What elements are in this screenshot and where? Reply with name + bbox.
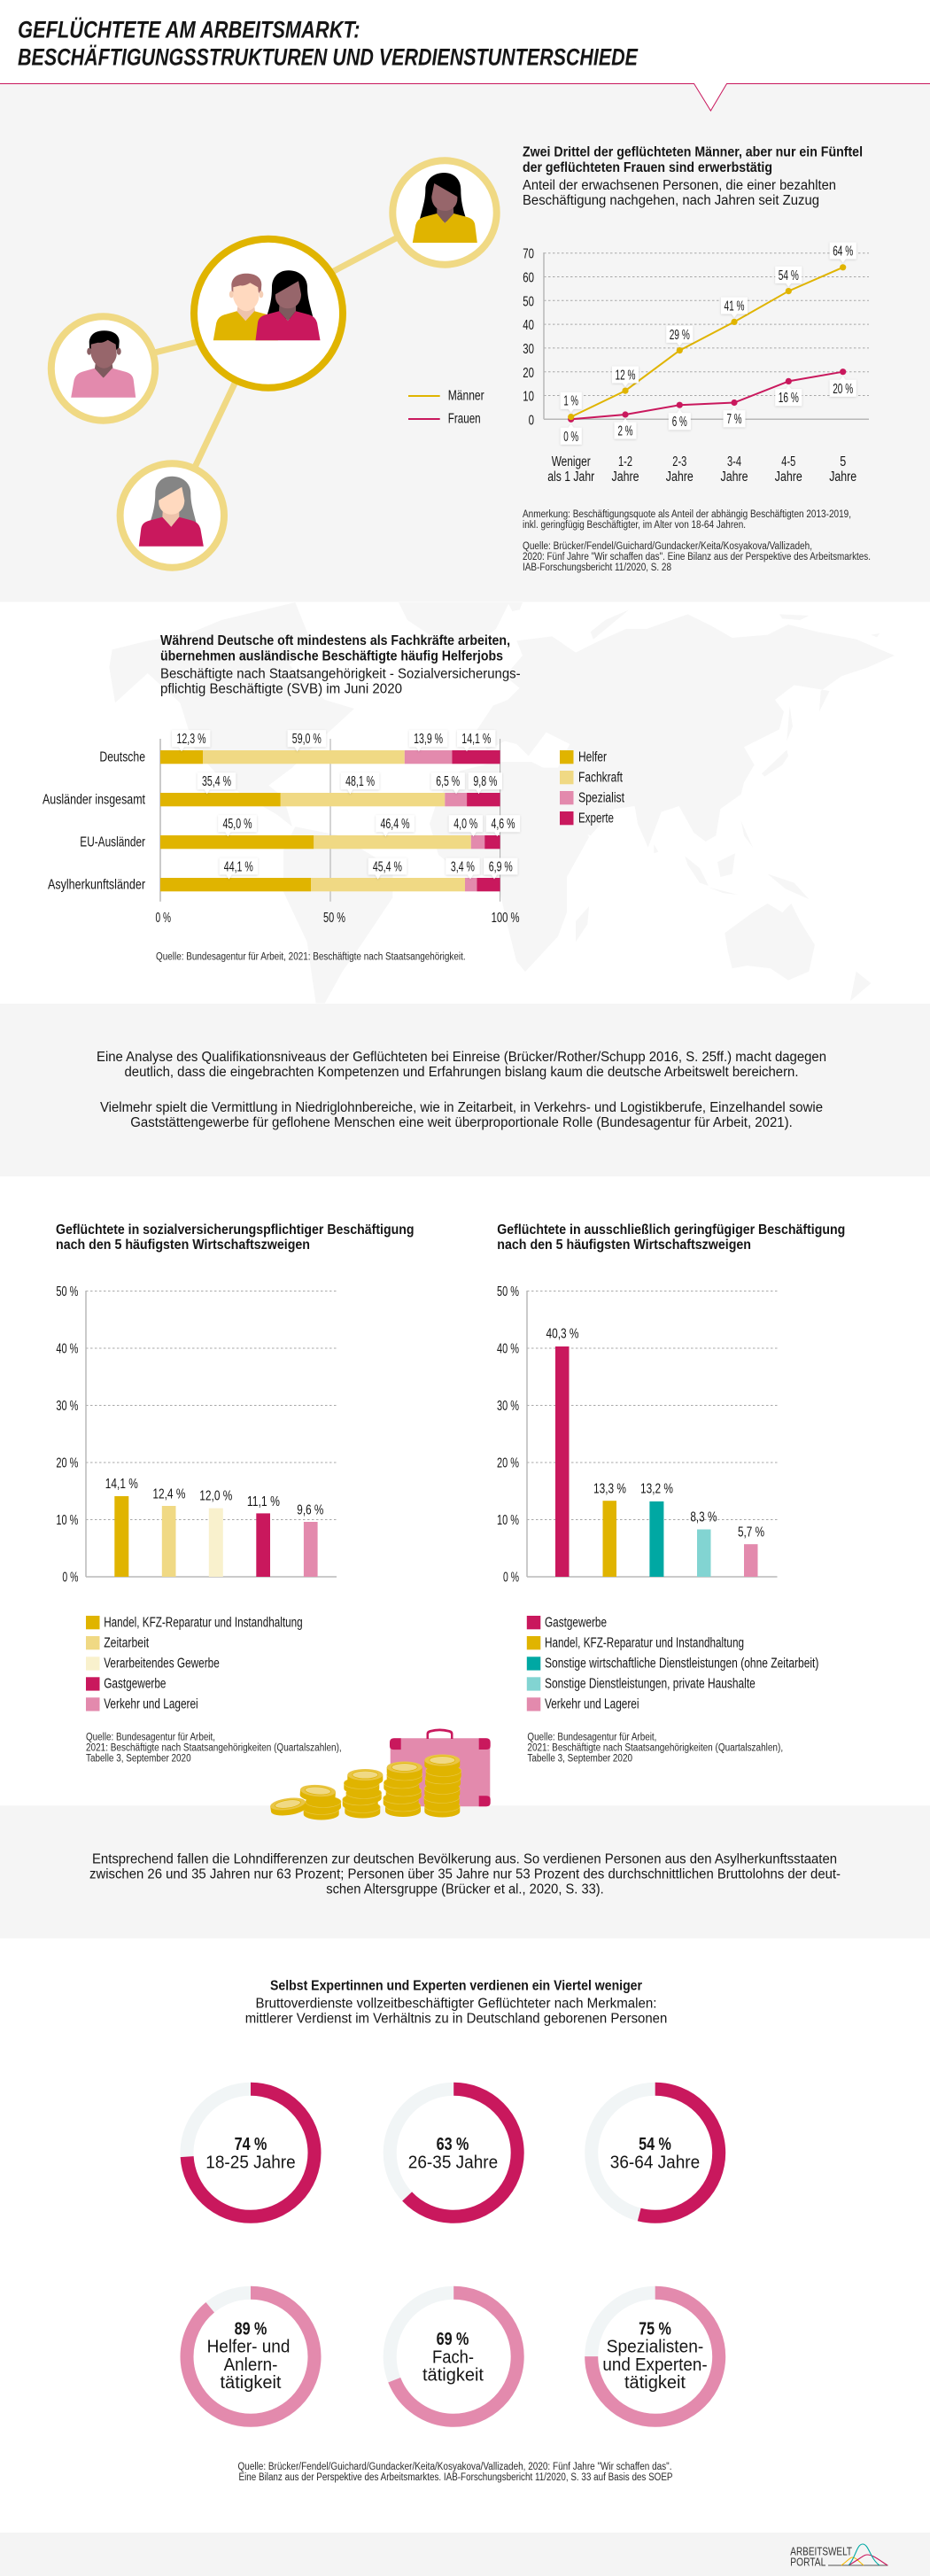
x axis labels: 0 % — [156, 911, 171, 926]
heading: left sector chart — [56, 1222, 415, 1253]
y axis labels: 0 % — [503, 1570, 519, 1586]
x axis labels: Jahre — [611, 469, 639, 485]
y axis labels: 20 — [523, 366, 534, 381]
source note: left sectors — [86, 1733, 342, 1765]
legend: left sectors: Zeitarbeit — [104, 1635, 150, 1651]
row: Deutsche: 14,1 % — [461, 732, 491, 747]
data labels: Männer: 12 % — [615, 369, 636, 383]
bars — [555, 1346, 758, 1577]
data labels: Frauen: 2 % — [618, 423, 633, 439]
x axis labels: 1-2 — [618, 454, 632, 469]
y axis labels: 30 — [523, 342, 534, 357]
source note: left sectors: Tabelle 3, September 2020 — [86, 1754, 191, 1765]
value labels: 13,3 % — [593, 1481, 626, 1497]
world map background — [109, 602, 895, 1004]
donut: 36-64 Jahre: 54 % — [639, 2135, 671, 2154]
heading: earnings: Selbst Expertinnen und Experten verdienen ein Viertel weniger — [270, 1979, 642, 1993]
logo: Arbeitswelt Portal: PORTAL — [790, 2556, 825, 2568]
row: EU-Ausländer: 46,4 % — [381, 817, 410, 832]
y axis labels — [497, 1284, 519, 1586]
panel: qualification text: Gaststättengewerbe für geflohene Menschen eine weit überproportionale Rolle (Bundesagentur für Arbeit, 2021). — [130, 1115, 793, 1130]
donut: Fachtätigkeit: Fach- — [432, 2347, 474, 2367]
donut: Spezialisten- und Expertentätigkeit — [592, 2293, 719, 2420]
x axis labels: Jahre — [721, 469, 748, 485]
donut: 18-25 Jahre: 74 % — [235, 2135, 267, 2154]
x axis labels: 4-5 — [781, 454, 795, 469]
source note: employment chart — [523, 509, 871, 573]
source note: right sectors — [527, 1733, 783, 1765]
row: Asylherkunftsländer — [48, 857, 517, 893]
data labels: Frauen: 20 % — [833, 382, 853, 397]
icon: man left — [51, 316, 155, 421]
icon: woman bottom — [120, 463, 224, 568]
row: Deutsche: 13,9 % — [414, 732, 443, 747]
y axis labels: 50 % — [56, 1284, 79, 1300]
source note: employment chart: inkl. geringfügig Beschäftigter, im Alter von 18-64 Jahren. — [523, 520, 746, 531]
data labels: Frauen — [561, 376, 856, 445]
legend: right sectors: Verkehr und Lagerei — [545, 1697, 639, 1711]
row: Ausländer insgesamt: Ausländer insgesamt — [43, 792, 146, 808]
row: Ausländer insgesamt: 48,1 % — [345, 774, 375, 789]
heading: qualification chart: pflichtig Beschäftigte (SVB) im Juni 2020 — [160, 682, 402, 696]
source note: employment chart: 2020: Fünf Jahre "Wir schaffen das". Eine Bilanz aus der Perspektive des Arbeitsmarktes. — [523, 552, 871, 563]
row: EU-Ausländer: 4,6 % — [491, 817, 515, 832]
data labels: Frauen: 0 % — [563, 430, 578, 445]
row: Asylherkunftsländer: 44,1 % — [224, 859, 253, 874]
legend: right sectors: Gastgewerbe — [545, 1616, 607, 1630]
source note: qualification chart: Quelle: Bundesagentur für Arbeit, 2021: Beschäftigte nach Staatsangehörigkeit. — [156, 951, 466, 962]
donut: Helfer- und Anlerntätigkeit: 89 % — [235, 2319, 267, 2339]
heading: left sector chart: nach den 5 häufigsten Wirtschaftszweigen — [56, 1238, 310, 1253]
x axis labels: Jahre — [666, 469, 694, 485]
x axis labels: 5 — [840, 454, 846, 469]
y axis labels: 70 — [523, 246, 534, 262]
icon: coin stacks — [269, 1754, 461, 1819]
row: Asylherkunftsländer: Asylherkunftsländer — [48, 877, 145, 893]
row: Deutsche — [99, 730, 500, 765]
row: Deutsche: Deutsche — [99, 749, 145, 765]
y axis labels: 40 — [523, 318, 534, 333]
legend: qualification levels: Spezialist — [578, 790, 625, 806]
donut: Helfer- und Anlerntätigkeit: Helfer- und — [207, 2338, 290, 2357]
panel: wage text: schen Altersgruppe (Brücker et al., 2020, S. 33). — [326, 1882, 604, 1897]
source note: left sectors: Quelle: Bundesagentur für Arbeit, — [86, 1733, 215, 1743]
y axis labels: 40 % — [497, 1341, 519, 1357]
y axis labels: 0 % — [62, 1570, 79, 1586]
Africa, Greenland, Americas — [430, 762, 589, 972]
row: EU-Ausländer: 4,0 % — [453, 817, 477, 832]
row: Ausländer insgesamt: 35,4 % — [202, 774, 231, 789]
heading: employment chart — [523, 145, 863, 208]
source note: earnings: Eine Bilanz aus der Perspektive des Arbeitsmarktes. IAB-Forschungsbericht 11/2020, S. 33 auf Basis des SOEP — [239, 2472, 673, 2483]
data labels: Männer: 1 % — [563, 393, 578, 409]
source note: left sectors: 2021: Beschäftigte nach Staatsangehörigkeiten (Quartalszahlen), — [86, 1743, 342, 1754]
value labels: 12,0 % — [199, 1489, 232, 1504]
source note: right sectors: Quelle: Bundesagentur für Arbeit, — [527, 1733, 656, 1743]
y axis labels: 0 — [529, 413, 534, 429]
title — [18, 16, 639, 71]
heading: employment chart: Beschäftigung nachgehen, nach Jahren seit Zuzug — [523, 193, 819, 208]
y axis labels — [56, 1284, 79, 1586]
logo: Arbeitswelt Portal: ARBEITSWELT — [790, 2545, 852, 2557]
line chart: employment by years since arrival — [523, 243, 869, 485]
x axis labels: 3-4 — [727, 454, 741, 469]
heading: left sector chart: Geflüchtete in sozialversicherungspflichtiger Beschäftigung — [56, 1222, 415, 1238]
y axis labels: 20 % — [56, 1456, 79, 1470]
panel: qualification text: deutlich, dass die eingebrachten Kompetenzen und Erfahrungen bislang kaum die deutsche Arbeitswelt bereichern. — [124, 1065, 799, 1080]
value labels — [105, 1477, 323, 1518]
donut: Fachtätigkeit: 69 % — [437, 2330, 469, 2349]
bar chart: left sectors — [56, 1284, 337, 1586]
value labels — [546, 1327, 764, 1540]
row: EU-Ausländer: EU-Ausländer — [80, 834, 145, 850]
icon: suitcase — [390, 1729, 491, 1806]
source note: employment chart: Anmerkung: Beschäftigungsquote als Anteil der abhängig Beschäftigten 2013-2019, — [523, 509, 851, 520]
y axis labels — [523, 246, 534, 429]
legend: right sectors: Sonstige wirtschaftliche Dienstleistungen (ohne Zeitarbeit) — [545, 1657, 818, 1671]
row: EU-Ausländer: 45,0 % — [223, 817, 252, 832]
title: GEFLÜCHTETE AM ARBEITSMARKT: — [18, 16, 360, 43]
y axis labels: 10 % — [497, 1513, 519, 1528]
x axis labels: 50 % — [323, 911, 345, 926]
data labels: Männer: 64 % — [833, 244, 853, 259]
legend: right sectors: Sonstige Dienstleistungen, private Haushalte — [545, 1676, 756, 1692]
heading: right sector chart: Geflüchtete in ausschließlich geringfügiger Beschäftigung — [497, 1222, 845, 1238]
y axis labels: 10 — [523, 390, 534, 404]
row: Ausländer insgesamt: 6,5 % — [436, 774, 460, 789]
icon: suitcase and coins — [269, 1729, 491, 1819]
donut: Fachtätigkeit: tätigkeit — [422, 2366, 484, 2386]
heading: qualification chart: Während Deutsche oft mindestens als Fachkräfte arbeiten, — [160, 633, 510, 648]
source note: employment chart: IAB-Forschungsbericht 11/2020, S. 28 — [523, 563, 671, 573]
value labels: 40,3 % — [546, 1327, 579, 1342]
x axis labels: Weniger — [552, 454, 591, 469]
bars — [114, 1496, 318, 1577]
row: Ausländer insgesamt: 9,8 % — [473, 774, 498, 789]
legend: line chart — [408, 388, 484, 427]
legend: right sectors — [527, 1616, 818, 1711]
y axis labels: 50 — [523, 294, 534, 309]
legend: qualification levels: Helfer — [578, 749, 607, 765]
y axis labels: 30 % — [56, 1399, 79, 1414]
heading: qualification chart — [160, 633, 521, 696]
heading: employment chart: der geflüchteten Frauen sind erwerbstätig — [523, 160, 772, 175]
data labels: Männer: 29 % — [670, 328, 690, 343]
row: Ausländer insgesamt — [43, 772, 502, 808]
heading: right sector chart: nach den 5 häufigsten Wirtschaftszweigen — [497, 1238, 751, 1253]
data labels: Männer: 54 % — [779, 268, 799, 283]
data labels: Frauen: 16 % — [779, 391, 799, 406]
row: Asylherkunftsländer: 3,4 % — [451, 859, 475, 874]
panel: qualification text: Vielmehr spielt die Vermittlung in Niedriglohnbereiche, wie in Zeitarbeit, in Verkehrs- und Logistikberufe, Einzelhandel sowie — [100, 1100, 823, 1115]
heading: earnings — [245, 1979, 667, 2027]
x axis labels: 100 % — [492, 911, 520, 926]
donut: Spezialisten- und Expertentätigkeit: Spezialisten- — [607, 2338, 703, 2357]
donut: 26-35 Jahre — [390, 2089, 517, 2216]
donut: 18-25 Jahre — [187, 2089, 314, 2216]
legend: left sectors — [86, 1616, 303, 1711]
value labels: 9,6 % — [297, 1502, 323, 1518]
panel: wage text — [0, 1805, 930, 1938]
y axis labels: 30 % — [497, 1399, 519, 1414]
data labels: Männer — [561, 243, 856, 413]
illustration: connected people — [51, 160, 497, 568]
panel: qualification text: Eine Analyse des Qualifikationsniveaus der Geflüchteten bei Einreise (Brücker/Rother/Schupp 2016, S. 25ff.) macht dagegen — [97, 1050, 826, 1065]
donut: Spezialisten- und Expertentätigkeit: 75 % — [639, 2319, 671, 2339]
data labels: Frauen: 6 % — [672, 415, 687, 430]
value labels: 11,1 % — [247, 1494, 280, 1509]
x axis labels: Jahre — [829, 469, 856, 485]
row: Asylherkunftsländer: 45,4 % — [373, 859, 402, 874]
donut: Helfer- und Anlerntätigkeit: tätigkeit — [220, 2373, 282, 2393]
source note: right sectors: 2021: Beschäftigte nach Staatsangehörigkeiten (Quartalszahlen), — [527, 1743, 783, 1754]
donut: 26-35 Jahre: 63 % — [437, 2135, 469, 2154]
data labels: Frauen: 7 % — [726, 412, 742, 427]
logo: Arbeitswelt Portal — [790, 2544, 887, 2568]
y axis labels: 60 — [523, 270, 534, 285]
value labels: 12,4 % — [152, 1486, 186, 1502]
row: Asylherkunftsländer: 6,9 % — [489, 859, 513, 874]
icon: couple centre — [194, 239, 343, 388]
row: Deutsche: 59,0 % — [292, 732, 322, 747]
donut: Helfer- und Anlerntätigkeit — [187, 2293, 314, 2420]
panel: wage text: zwischen 26 und 35 Jahren nur 63 Prozent; Personen über 35 Jahre nur 53 Prozent des durchschnittlichen Bruttolohns der deut- — [89, 1866, 841, 1882]
value labels: 14,1 % — [105, 1477, 138, 1492]
heading: employment chart: Anteil der erwachsenen Personen, die einer bezahlten — [523, 178, 836, 193]
donut: 36-64 Jahre: 36-64 Jahre — [610, 2153, 700, 2172]
donut: Spezialisten- und Expertentätigkeit: und Experten- — [602, 2355, 708, 2375]
legend: line chart: Männer — [448, 388, 484, 404]
legend: qualification levels: Fachkraft — [578, 771, 624, 785]
panel: employment rate background with notch — [0, 83, 930, 602]
legend: left sectors: Handel, KFZ-Reparatur und Instandhaltung — [104, 1616, 303, 1630]
bar chart: right sectors — [497, 1284, 778, 1586]
heading: earnings: mittlerer Verdienst im Verhältnis zu in Deutschland geborenen Personen — [245, 2011, 667, 2027]
heading: qualification chart: Beschäftigte nach Staatsangehörigkeit - Sozialversicherungs- — [160, 666, 521, 682]
legend: left sectors: Verkehr und Lagerei — [104, 1697, 198, 1711]
y axis labels: 40 % — [56, 1341, 79, 1357]
donut: 26-35 Jahre: 26-35 Jahre — [408, 2153, 498, 2172]
panel: qualification text — [0, 1004, 930, 1176]
icon: woman top right — [392, 160, 497, 265]
legend: right sectors: Handel, KFZ-Reparatur und Instandhaltung — [545, 1635, 744, 1651]
donut: Fachtätigkeit — [390, 2293, 517, 2420]
heading: employment chart: Zwei Drittel der geflüchteten Männer, aber nur ein Fünftel — [523, 145, 863, 160]
stacked bar chart: qualification level — [43, 730, 520, 926]
heading: qualification chart: übernehmen ausländische Beschäftigte häufig Helferjobs — [160, 648, 503, 664]
y axis labels: 20 % — [497, 1456, 519, 1470]
legend: left sectors: Verarbeitendes Gewerbe — [104, 1657, 220, 1671]
series: Männer — [568, 264, 846, 420]
footer band — [0, 2533, 930, 2576]
value labels: 8,3 % — [690, 1510, 717, 1525]
heading: earnings: Bruttoverdienste vollzeitbeschäftigter Geflüchteter nach Merkmalen: — [255, 1996, 657, 2011]
donut: Spezialisten- und Expertentätigkeit: tätigkeit — [624, 2373, 686, 2393]
donut: 36-64 Jahre — [592, 2089, 719, 2216]
source note: earnings — [237, 2462, 673, 2483]
legend: qualification levels: Experte — [578, 811, 614, 826]
donut: Helfer- und Anlerntätigkeit: Anlern- — [224, 2355, 277, 2375]
row: EU-Ausländer — [80, 815, 520, 850]
value labels: 13,2 % — [640, 1481, 673, 1497]
data labels: Männer: 41 % — [725, 299, 745, 314]
y axis labels: 10 % — [56, 1513, 79, 1528]
source note: employment chart: Quelle: Brücker/Fendel/Guichard/Gundacker/Keita/Kosyakova/Vallizadeh, — [523, 541, 812, 552]
series: Frauen — [568, 369, 846, 423]
source note: earnings: Quelle: Brücker/Fendel/Guichard/Gundacker/Keita/Kosyakova/Vallizadeh, 2020: Fünf Jahre "Wir schaffen das". — [237, 2462, 671, 2472]
x axis labels — [547, 454, 856, 485]
legend: line chart: Frauen — [448, 411, 481, 427]
x axis labels: Jahre — [775, 469, 802, 485]
title: BESCHÄFTIGUNGSSTRUKTUREN UND VERDIENSTUNTERSCHIEDE — [18, 44, 639, 71]
legend: left sectors: Gastgewerbe — [104, 1676, 167, 1692]
x axis labels: als 1 Jahr — [547, 469, 594, 485]
x axis labels: 2-3 — [672, 454, 686, 469]
donut: 18-25 Jahre: 18-25 Jahre — [205, 2153, 296, 2172]
legend: qualification levels — [560, 749, 625, 826]
value labels: 5,7 % — [738, 1525, 764, 1540]
heading: right sector chart — [497, 1222, 845, 1253]
source note: right sectors: Tabelle 3, September 2020 — [527, 1754, 632, 1765]
y axis labels: 50 % — [497, 1284, 519, 1300]
x axis labels — [156, 911, 520, 926]
row: Deutsche: 12,3 % — [177, 732, 206, 747]
panel: wage text: Entsprechend fallen die Lohndifferenzen zur deutschen Bevölkerung aus. So verdienen Personen aus den Asylherkunftsstaaten — [92, 1851, 837, 1866]
